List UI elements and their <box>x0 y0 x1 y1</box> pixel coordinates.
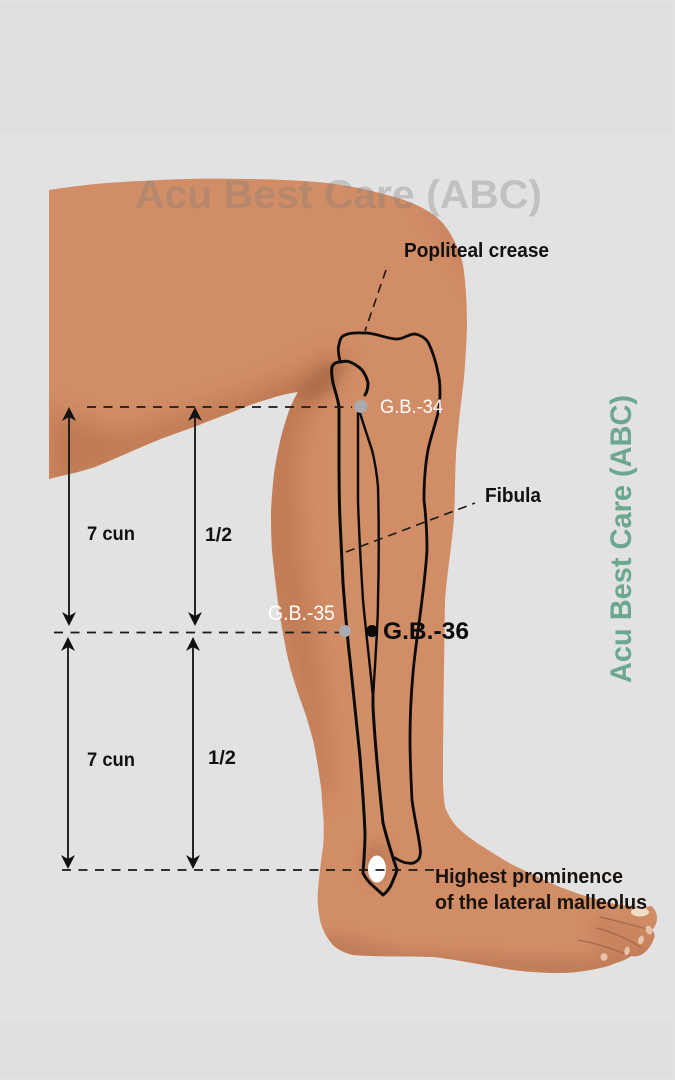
label: highest prominence of the lateral malleolus <box>435 866 647 914</box>
watermark vertical: Acu Best Care (ABC) <box>605 395 638 683</box>
label: highest prominence of the lateral malleolus: of the lateral malleolus <box>435 892 647 914</box>
label: G.B.-36: G.B.-36 <box>383 618 469 645</box>
point: G.B.-34 <box>354 400 368 413</box>
label: highest prominence of the lateral malleolus: Highest prominence <box>435 866 623 888</box>
arrow: 7 cun lower <box>61 637 75 869</box>
fibula inner left <box>358 413 373 697</box>
toenails <box>599 908 654 962</box>
label: 7 cun lower: 7 cun <box>87 750 135 771</box>
toe creases <box>578 917 650 956</box>
label: G.B.-34: G.B.-34 <box>380 397 443 418</box>
fibula outer <box>332 361 397 895</box>
label: 7 cun upper: 7 cun <box>87 524 135 545</box>
label: G.B.-35: G.B.-35 <box>268 602 335 625</box>
label: popliteal crease: Popliteal crease <box>404 240 549 262</box>
top band <box>0 2 672 133</box>
infographic canvas <box>49 178 657 973</box>
label: fibula: Fibula <box>485 485 542 507</box>
label: 1/2 upper: 1/2 <box>205 525 232 546</box>
leg illustration <box>40 170 670 985</box>
lateral malleolus marker <box>368 856 386 882</box>
arrow: half upper <box>188 407 202 626</box>
bottom band <box>0 1021 672 1078</box>
arrow: half lower <box>186 637 200 869</box>
tibia inner right <box>360 413 379 697</box>
watermark horizontal: Acu Best Care (ABC) <box>135 173 542 217</box>
arrow: 7 cun upper <box>62 407 76 626</box>
bones outline <box>332 333 440 895</box>
point: G.B.-35 <box>339 625 351 637</box>
dashed guide lines <box>54 270 475 870</box>
point: G.B.-36 <box>366 625 378 637</box>
tibia <box>338 333 440 863</box>
label: 1/2 lower: 1/2 <box>208 748 236 769</box>
